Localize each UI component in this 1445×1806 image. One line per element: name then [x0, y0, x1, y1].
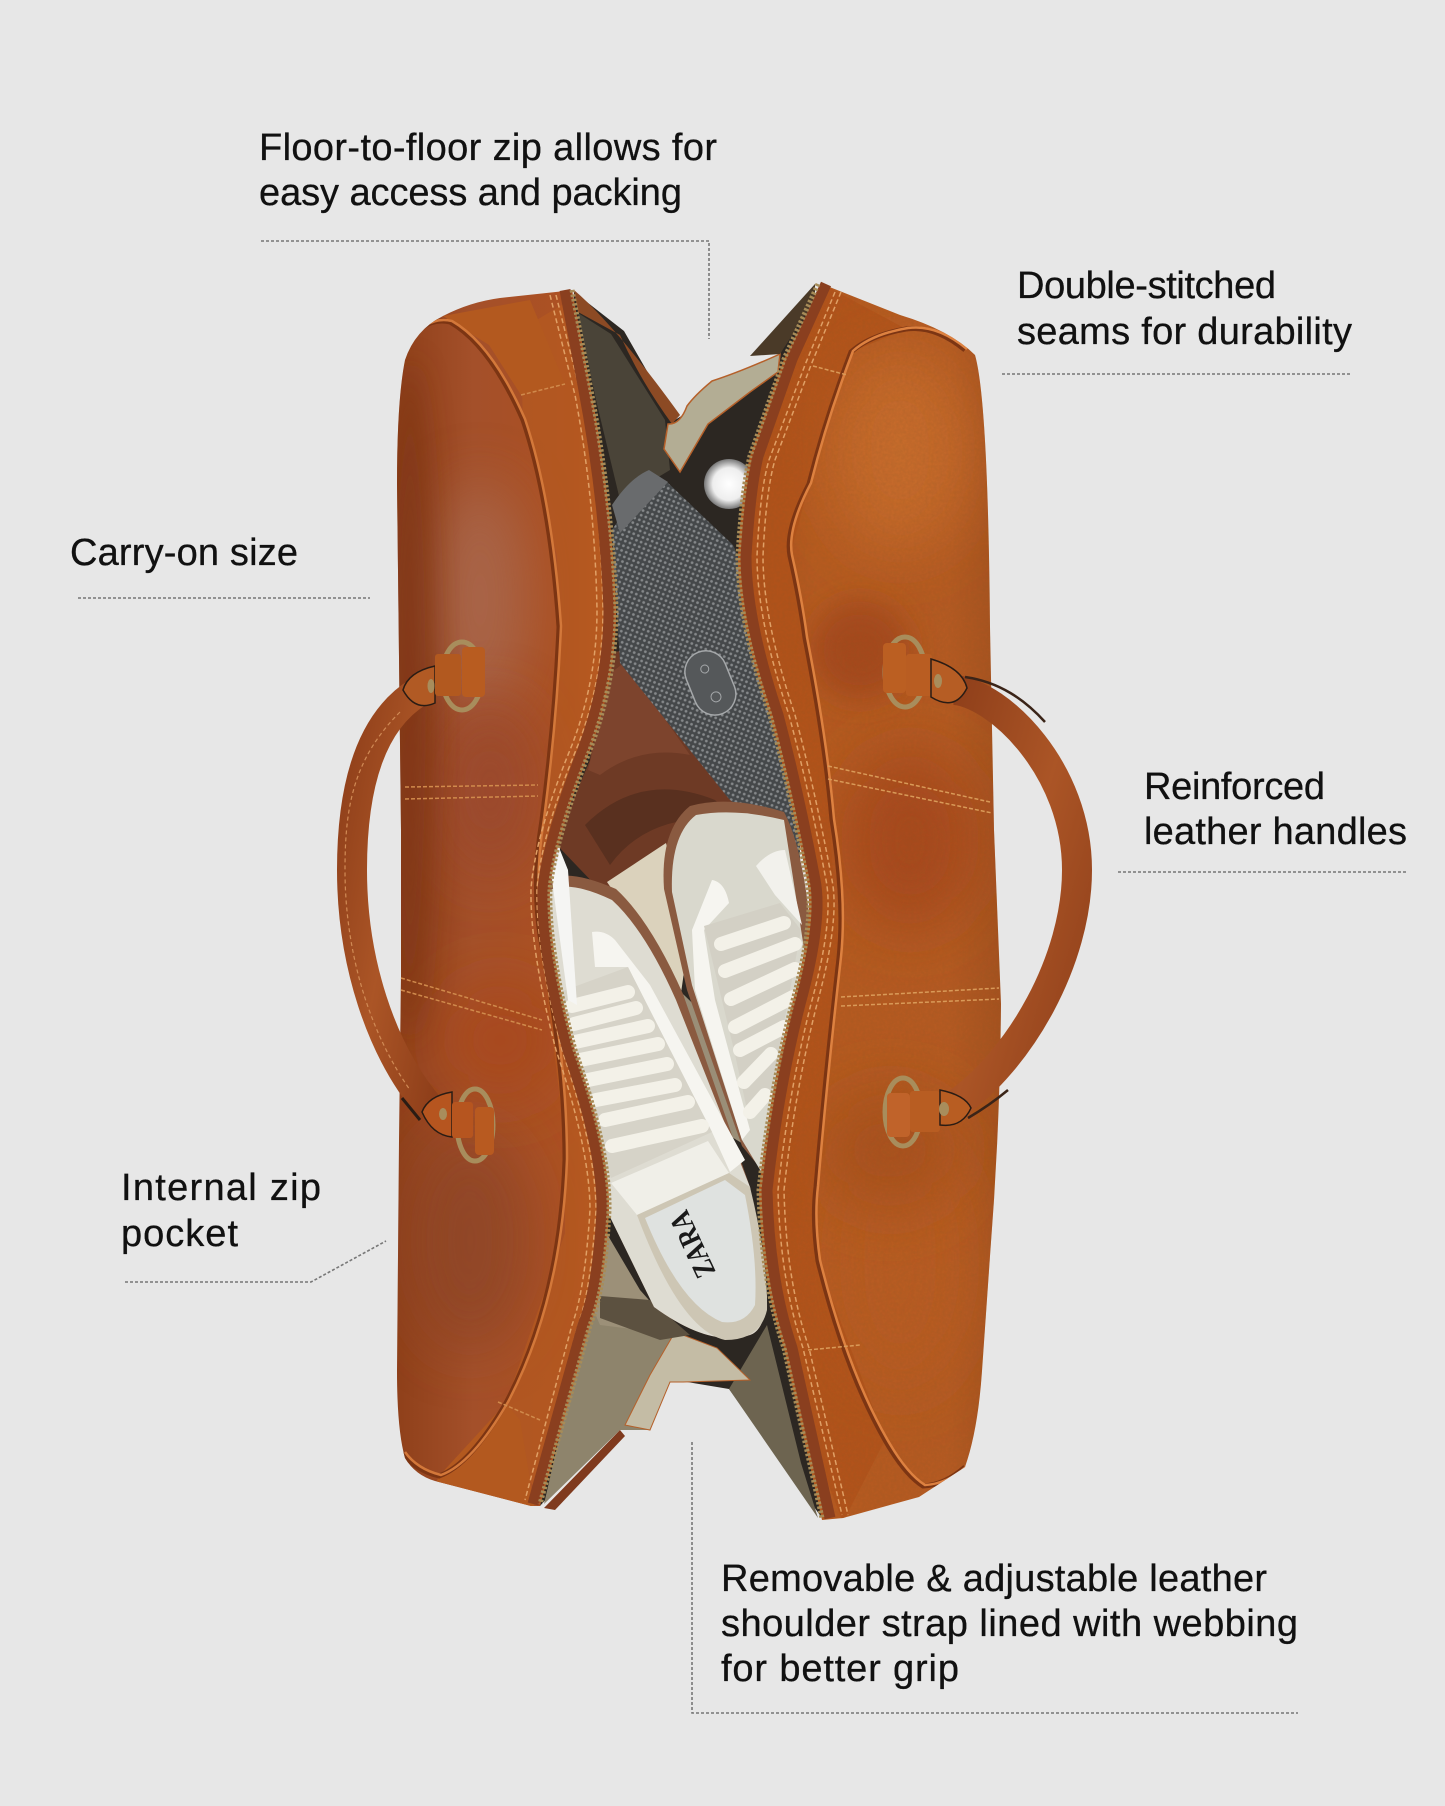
shoe rim — [637, 1173, 767, 1340]
insole — [645, 1180, 756, 1322]
left zipper — [533, 290, 609, 1504]
right zipper — [746, 284, 830, 1518]
khaki patch beneath shoe — [585, 1205, 680, 1335]
right shoe eyestay — [704, 903, 801, 1105]
brown sweater — [555, 650, 760, 900]
callout: floor-to-floor zip — [259, 127, 717, 339]
left upper buckle — [403, 642, 485, 710]
white side panel — [592, 932, 745, 1172]
left shoe laces — [572, 992, 702, 1146]
callout: double-stitched seams: Double-stitched — [1017, 265, 1276, 307]
fabric between shoes — [683, 994, 745, 1145]
upper beige lining — [664, 354, 780, 472]
right lower buckle — [885, 1078, 971, 1146]
callout: reinforced handles: Reinforced — [1144, 766, 1325, 808]
right shoe laces — [721, 923, 795, 1112]
callout: reinforced handles — [1118, 766, 1408, 872]
callout: shoulder strap: for better grip — [721, 1648, 959, 1690]
callout: floor-to-floor zip: Floor-to-floor zip allows for — [259, 127, 717, 169]
interior dark cavity — [540, 284, 822, 1518]
speaker button panel — [679, 644, 742, 721]
left panel stitching — [525, 295, 597, 1500]
callout: reinforced handles: leather handles — [1144, 811, 1407, 853]
white side panel — [692, 880, 750, 1140]
chrome cap — [704, 459, 754, 509]
callout: internal zip pocket: Internal zip — [121, 1167, 321, 1209]
right cross seams — [808, 366, 999, 1350]
left sneaker — [550, 876, 767, 1340]
lower beige lining — [625, 1332, 750, 1430]
lower-left lining — [544, 1290, 675, 1504]
cream cloth — [607, 843, 690, 1000]
sweater upper band — [588, 662, 690, 775]
upper-right flap — [750, 284, 815, 356]
bag interior — [540, 284, 822, 1518]
sweater fold — [585, 789, 735, 865]
callout: shoulder strap — [692, 1442, 1298, 1713]
bluetooth speaker — [612, 470, 800, 860]
right panel stitching — [757, 292, 842, 1515]
lower leather edge — [544, 1430, 625, 1510]
left panel piping seam — [403, 320, 567, 1476]
right panel piping seam — [789, 327, 967, 1486]
callout: double-stitched seams: seams for durability — [1017, 311, 1352, 353]
upper leather flap edge — [574, 290, 680, 424]
left lower buckle — [422, 1089, 494, 1161]
toe highlight — [756, 850, 802, 925]
right bag panel — [730, 280, 1010, 1530]
right sneaker — [664, 802, 815, 1180]
callout: internal zip pocket — [121, 1167, 386, 1282]
left cross seams — [401, 384, 565, 1420]
callout: double-stitched seams — [1002, 265, 1352, 374]
lower right lining — [729, 1325, 818, 1518]
callout: carry-on size: Carry-on size — [70, 532, 298, 574]
left shoe eyestay — [560, 967, 712, 1178]
tongue — [611, 1141, 729, 1215]
right carry handle — [955, 677, 1077, 1118]
callout: shoulder strap: Removable & adjustable leather — [721, 1558, 1267, 1600]
callout: shoulder strap: shoulder strap lined with webbing — [721, 1603, 1298, 1645]
left bag panel — [385, 290, 630, 1510]
callout: floor-to-floor zip: easy access and packing — [259, 172, 682, 214]
upper-left lining flap — [578, 313, 670, 500]
dark lining fold — [600, 1296, 690, 1340]
callout: internal zip pocket: pocket — [121, 1213, 238, 1255]
brand on insole: ZARA — [663, 1205, 722, 1283]
speaker end cap — [612, 470, 668, 533]
left carry handle — [345, 692, 430, 1120]
right upper buckle — [883, 637, 967, 707]
bag illustration — [345, 280, 1077, 1530]
white sliver beside zip — [552, 850, 577, 1005]
